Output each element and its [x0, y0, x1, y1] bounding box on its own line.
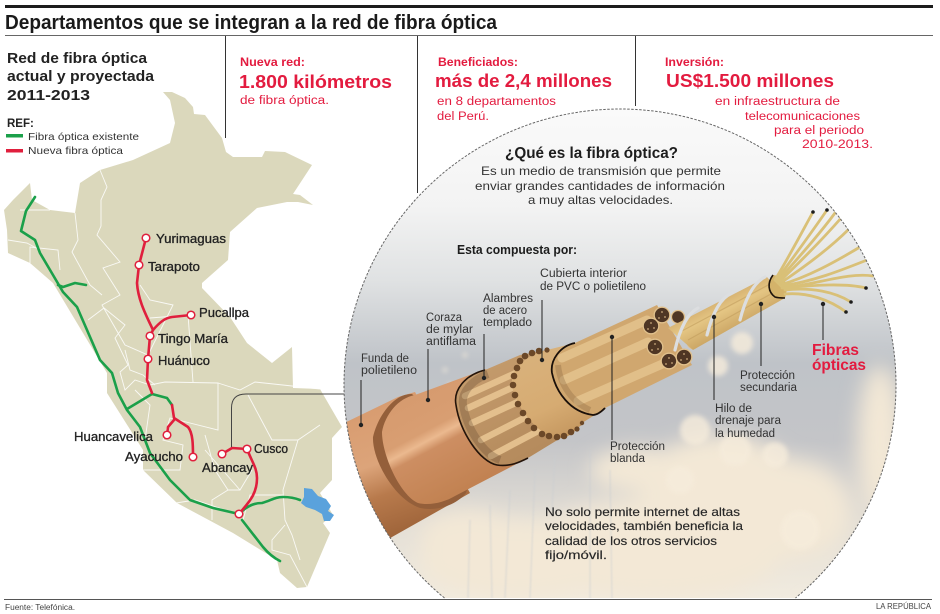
background glow	[426, 360, 896, 564]
stat: inversion: US$1.500 millones	[666, 70, 834, 91]
cable: front fibre tube ends	[661, 349, 692, 369]
city labels: Huancavelica	[74, 430, 153, 444]
label: fibras opticas: Fibras	[812, 342, 859, 359]
new fibre routes	[137, 238, 257, 514]
cable: steel wire section	[456, 350, 582, 465]
label: funda de polietileno: polietileno	[361, 365, 417, 377]
column divider: inversion	[634, 36, 636, 106]
label: coraza de mylar: antiflama	[426, 336, 477, 348]
header rule	[5, 35, 933, 36]
city labels: Abancay	[202, 461, 254, 475]
label: proteccion secundaria: secundaria	[740, 382, 798, 394]
definition text: a muy altas velocidades.	[528, 193, 673, 207]
optical fibres	[775, 210, 873, 312]
label: proteccion blanda: Protección	[610, 441, 665, 453]
stat: nueva red: de fibra óptica.	[240, 95, 329, 107]
circle outline	[344, 109, 896, 598]
label: proteccion blanda	[610, 335, 665, 465]
existing fibre routes	[21, 197, 300, 561]
city labels: Cusco	[254, 442, 288, 456]
subheading: esta compuesta por: Esta compuesta por:	[457, 243, 577, 257]
definition text: enviar grandes cantidades de información	[475, 179, 725, 193]
city nodes	[135, 234, 251, 518]
closing note	[545, 505, 743, 562]
map of Peru	[4, 92, 344, 588]
lake Titicaca	[301, 488, 334, 521]
legend: Nueva fibra óptica	[28, 145, 123, 157]
stat: beneficiados: más de 2,4 millones	[435, 70, 612, 91]
city labels: Tingo María	[158, 332, 228, 346]
city labels: Tarapoto	[148, 260, 200, 274]
label: cubierta interior: de PVC o polietileno	[540, 281, 646, 293]
cable: mylar armor	[382, 369, 528, 504]
cable: drainage wire spiral	[675, 277, 765, 350]
closing note: velocidades, también beneficia la	[545, 519, 743, 533]
cable: outer sheath	[346, 392, 470, 538]
cable: rear fibre tube ends	[643, 307, 698, 355]
definition text	[475, 164, 725, 207]
closing note: calidad de los otros servicios	[545, 534, 717, 548]
city labels: Yurimaguas	[156, 232, 226, 246]
stat: inversion	[665, 55, 873, 151]
definition text: Es un medio de transmisión que permite	[481, 164, 721, 178]
column divider: nueva red	[224, 36, 226, 138]
closing note: fijo/móvil.	[545, 548, 607, 562]
stat: nueva red: Nueva red:	[240, 55, 305, 69]
stat: inversion: para el periodo	[774, 125, 864, 137]
stat: beneficiados	[435, 55, 612, 123]
label: fibras opticas	[812, 302, 866, 374]
label: cubierta interior	[540, 268, 646, 362]
city labels: Ayacucho	[125, 450, 183, 464]
heading: que es la fibra optica: ¿Qué es la fibra óptica?	[505, 145, 678, 162]
callout connector to cable	[232, 394, 344, 447]
label: funda de polietileno: Funda de	[361, 353, 409, 365]
legend: REF:	[7, 118, 34, 130]
map heading: 2011-2013	[7, 88, 90, 104]
department borders	[8, 170, 320, 587]
city labels	[74, 232, 288, 475]
cable: collar	[373, 394, 470, 509]
label: alambres de acero: Alambres	[483, 293, 533, 305]
label: cubierta interior: Cubierta interior	[540, 268, 627, 280]
stat: inversion: telecomunicaciones	[745, 111, 860, 123]
legend: Fibra óptica existente	[28, 131, 139, 143]
label: fibras opticas: ópticas	[812, 357, 866, 374]
label: hilo de drenaje: drenaje para	[715, 415, 782, 427]
credit: LA REPÚBLICA	[876, 602, 932, 611]
stat: inversion: Inversión:	[665, 55, 724, 69]
label: alambres de acero	[482, 293, 533, 380]
stat: inversion: en infraestructura de	[715, 96, 840, 108]
stat: beneficiados: en 8 departamentos	[437, 96, 556, 108]
map landmass	[4, 92, 342, 588]
cable: inner cover	[512, 343, 606, 438]
map heading	[7, 51, 155, 104]
label: hilo de drenaje	[712, 315, 782, 440]
label: coraza de mylar	[426, 312, 477, 402]
label: coraza de mylar: Coraza	[426, 312, 463, 324]
source: Fuente: Telefónica.	[5, 603, 75, 612]
fibre end dots	[811, 208, 868, 314]
stat: nueva red: 1.800 kilómetros	[239, 71, 392, 92]
label: hilo de drenaje: Hilo de	[715, 403, 752, 415]
circle background	[344, 151, 896, 598]
label: alambres de acero: de acero	[483, 305, 527, 317]
stat: nueva red	[239, 55, 392, 107]
label: proteccion secundaria	[740, 302, 798, 394]
cable: secondary protection shaft	[668, 277, 785, 350]
map heading: Red de fibra óptica	[7, 51, 148, 67]
cable: end ring	[769, 275, 788, 298]
stat: beneficiados: del Perú.	[437, 111, 489, 123]
magnifier circle with cable	[338, 100, 902, 600]
title: Departamentos que se integran a la red de fibra óptica	[5, 12, 498, 34]
label: funda de polietileno	[359, 353, 417, 427]
cable: soft protection tubes	[552, 305, 692, 415]
top bar	[5, 5, 933, 8]
city labels: Huánuco	[158, 354, 210, 368]
column divider: beneficiados	[416, 36, 418, 193]
label: coraza de mylar: de mylar	[426, 324, 473, 336]
closing note: No solo permite internet de altas	[545, 505, 740, 519]
label: alambres de acero: templado	[483, 317, 532, 329]
city labels: Pucallpa	[199, 306, 249, 320]
map heading: actual y proyectada	[7, 69, 155, 85]
stat: beneficiados: Beneficiados:	[438, 55, 518, 69]
cable: wire ring	[510, 347, 584, 440]
label: hilo de drenaje: la humedad	[715, 428, 775, 440]
label: proteccion blanda: blanda	[610, 453, 646, 465]
footer rule	[4, 599, 932, 600]
label: proteccion secundaria: Protección	[740, 370, 795, 382]
cable: tube end wire pattern	[647, 311, 688, 365]
legend	[6, 118, 139, 157]
stat: inversion: 2010-2013.	[802, 139, 873, 151]
